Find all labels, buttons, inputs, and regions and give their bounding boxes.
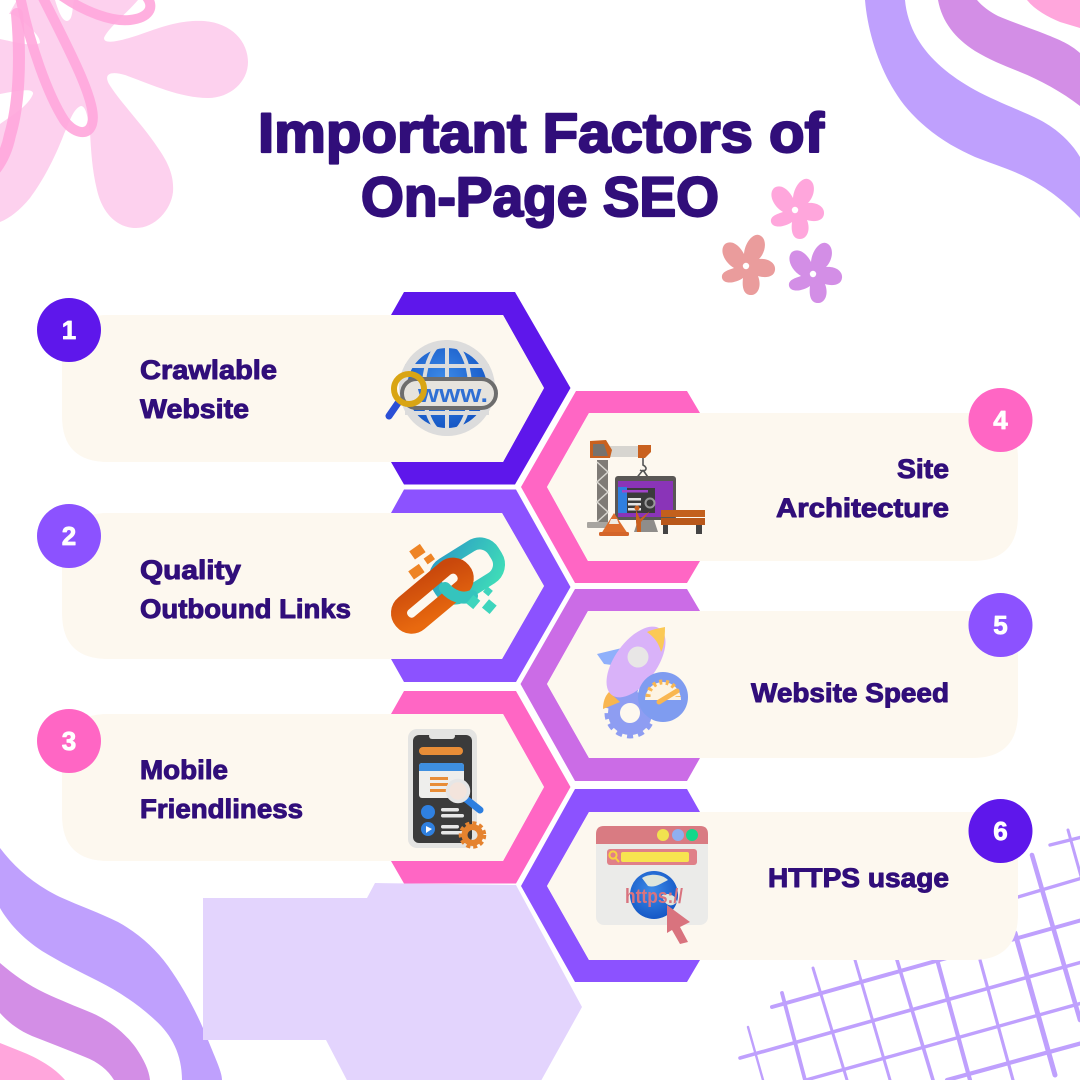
label: Site Architecture <box>776 454 949 523</box>
panel: 4 Site Architecture <box>521 388 1032 583</box>
icon: globe www with magnifier: www. <box>417 381 488 408</box>
label: Website Speed: Website Speed <box>751 678 949 708</box>
icon: smartphone with gear <box>408 729 484 848</box>
label: Crawlable Website: Website <box>140 394 249 424</box>
icon: globe www with magnifier <box>389 340 496 436</box>
decoration: bottom-right grid <box>740 830 1080 1080</box>
number badge 1: 1 <box>62 315 76 345</box>
title <box>258 101 824 228</box>
label: Site Architecture: Site <box>897 454 949 484</box>
number badge 5 <box>968 593 1032 657</box>
number badge 5: 5 <box>993 610 1008 640</box>
icon: chain link <box>394 537 505 631</box>
icon: browser window with https globe: https:// <box>625 886 683 908</box>
panel: 2 Quality Outbound Links <box>37 490 570 682</box>
decoration: top-right waves <box>865 0 1080 218</box>
number badge 3 <box>37 709 101 773</box>
number badge 3: 3 <box>62 726 76 756</box>
decoration: top-left pink flower <box>0 0 248 228</box>
number badge 1 <box>37 298 101 362</box>
panel: 5 Website Speed <box>520 589 1032 781</box>
number badge 4 <box>968 388 1032 452</box>
panel: 1 Crawlable Website <box>37 292 570 484</box>
title: On-Page SEO <box>361 165 719 228</box>
label: Mobile Friendliness: Mobile <box>140 755 228 785</box>
icon: browser window with https globe <box>596 826 708 944</box>
title: Important Factors of <box>258 101 824 164</box>
label: Quality Outbound Links <box>140 555 351 624</box>
label: Site Architecture: Architecture <box>776 493 949 523</box>
panel: 3 Mobile Friendliness <box>37 691 570 884</box>
decoration: three small flowers <box>722 179 842 303</box>
number badge 2: 2 <box>62 521 76 551</box>
decoration: bottom-left waves <box>0 848 222 1080</box>
label: Mobile Friendliness: Friendliness <box>140 794 303 824</box>
panel: 6 HTTPS usage <box>521 789 1032 982</box>
label: HTTPS usage: HTTPS usage <box>768 863 949 893</box>
label: Quality Outbound Links: Quality <box>140 555 241 585</box>
label: Mobile Friendliness <box>140 755 303 824</box>
number badge 2 <box>37 504 101 568</box>
label: Quality Outbound Links: Outbound Links <box>140 594 351 624</box>
number badge 6: 6 <box>993 816 1008 846</box>
number badge 4: 4 <box>993 405 1008 435</box>
number badge 6 <box>968 799 1032 863</box>
decorative lavender hexagon block <box>203 883 582 1080</box>
icon: rocket with gear and gauge <box>595 616 688 736</box>
icon: construction crane and monitor <box>587 440 705 536</box>
label: Crawlable Website: Crawlable <box>140 355 277 385</box>
label: Crawlable Website <box>140 355 277 424</box>
